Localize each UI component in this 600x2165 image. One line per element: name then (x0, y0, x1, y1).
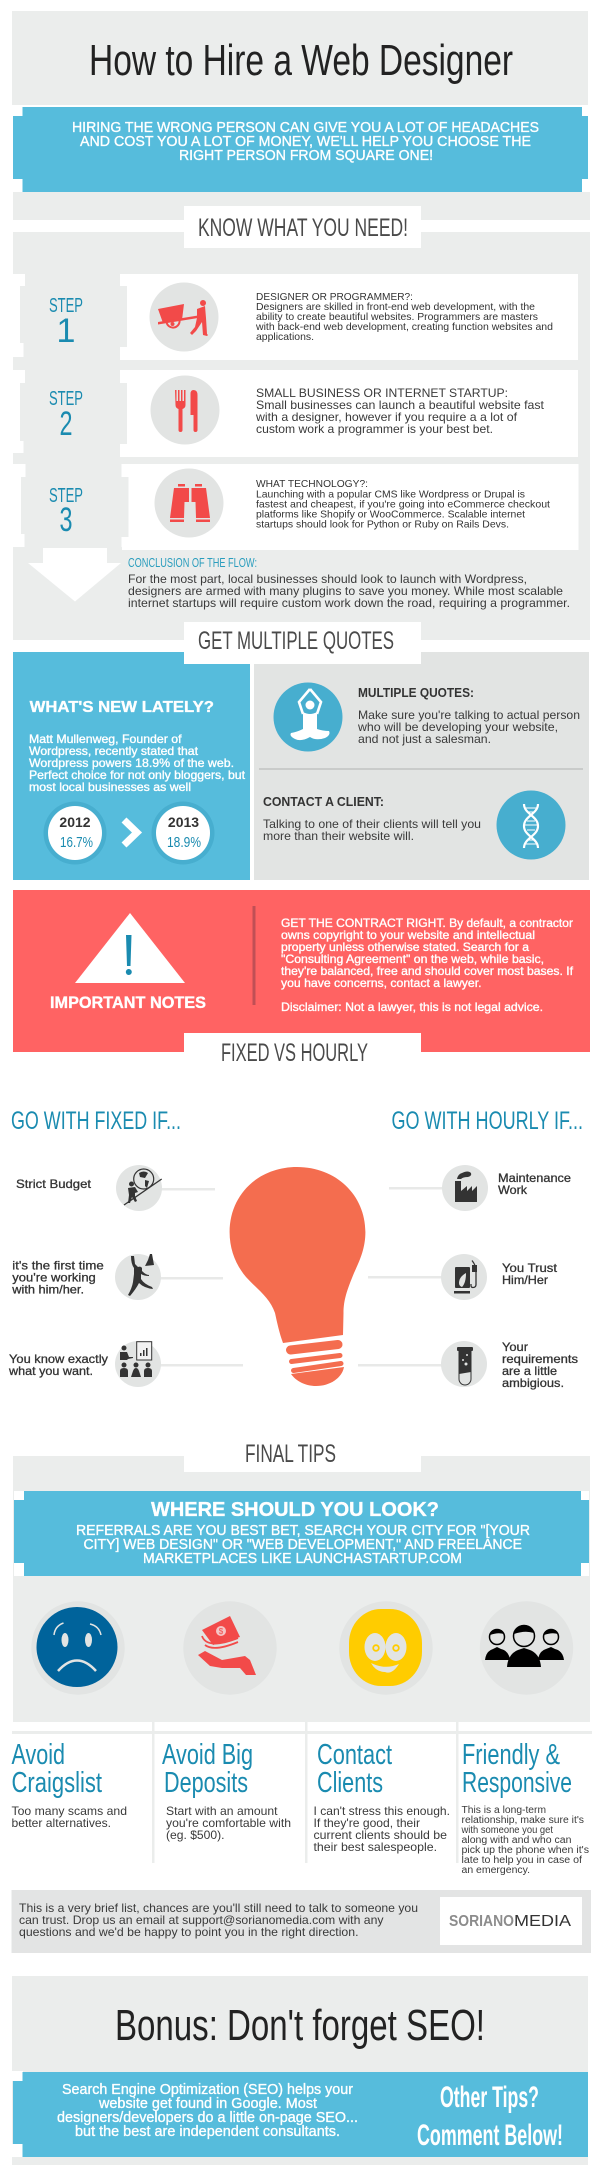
important notes text: owns copyright to your website and intellectual (281, 928, 535, 942)
item: you trust him/her: You Trust (502, 1261, 558, 1275)
tip: friendly and responsive (461, 1739, 589, 1876)
bonus banner: designers/developers do a little on-page SEO... (57, 2109, 358, 2126)
callout: other tips (417, 2081, 563, 2152)
important notes text: Disclaimer: Not a lawyer, this is not legal advice. (281, 1000, 543, 1014)
tip: friendly and responsive: an emergency. (462, 1865, 530, 1876)
conclusion: CONCLUSION OF THE FLOW: (128, 555, 257, 570)
title panel (12, 11, 588, 105)
icon: fork and knife (150, 376, 220, 444)
step 3 text: Launching with a popular CMS like Wordpress or Drupal is (256, 490, 525, 501)
step 3 text: WHAT TECHNOLOGY?: (256, 479, 368, 490)
icon: dna (496, 790, 566, 860)
tip: friendly and responsive: pick up the phone when it's (462, 1845, 589, 1856)
stat: 2013: 18.9% (167, 834, 201, 851)
item: know what you want: what you want. (8, 1364, 93, 1378)
step 3 text (256, 479, 550, 531)
what's new text: Matt Mullenweg, Founder of (29, 732, 182, 746)
panel: important notes (13, 890, 590, 1052)
tip: contact clients: If they're good, their (314, 1816, 420, 1830)
icon: warning triangle (75, 913, 185, 983)
logo: MEDIA (514, 1913, 571, 1930)
icon: money and hand (183, 1601, 277, 1695)
step 3 row: STEP (49, 485, 83, 507)
tip: friendly and responsive: late to help you in case of (462, 1855, 582, 1866)
conclusion (128, 555, 570, 610)
item: first time: it's the first time (12, 1258, 104, 1272)
step 3 row (13, 464, 578, 553)
item: strict budget: Strict Budget (16, 1177, 92, 1191)
contact strip (12, 1890, 591, 1953)
banner: where should you look: CITY] WEB DESIGN" OR "WEB DEVELOPMENT," AND FREELANCE (84, 1536, 522, 1553)
step 3 text: platforms like Shopify or WooCommerce. Scalable internet (256, 510, 525, 521)
bonus banner: but the best are independent consultants. (75, 2123, 340, 2140)
tip: contact clients: Contact (317, 1739, 392, 1771)
important notes text: GET THE CONTRACT RIGHT. By default, a contractor (281, 916, 573, 930)
tip: contact clients (314, 1739, 450, 1854)
contact strip: can trust. Drop us an email at support@sorianomedia.com with any (19, 1913, 384, 1927)
item: know what you want (8, 1341, 243, 1387)
bonus banner: Search Engine Optimization (SEO) helps your (62, 2081, 353, 2098)
what's new text: Wordpress powers 18.9% of the web. (29, 756, 234, 770)
heading: get multiple quotes (184, 622, 421, 664)
stat: 2013: 2013 (168, 814, 199, 830)
multiple quotes text: who will be developing your website, (357, 720, 558, 734)
stat: 2013 (152, 802, 214, 864)
multiple quotes text (357, 686, 580, 746)
heading: go with fixed: GO WITH FIXED IF... (11, 1107, 181, 1135)
panel: know what you need (13, 192, 590, 640)
icon: cart (150, 282, 218, 352)
intro text: RIGHT PERSON FROM SQUARE ONE! (179, 147, 433, 164)
tip: contact clients: current clients should be (314, 1828, 447, 1842)
important notes text: they're balanced, free and should cover most bases. If (281, 964, 574, 978)
tip: contact clients: their best salespeople. (314, 1840, 437, 1854)
heading: know what you need: KNOW WHAT YOU NEED! (198, 214, 408, 242)
step 2 text: custom work a programmer is your best bet. (256, 422, 493, 436)
item: you trust him/her (368, 1254, 558, 1300)
icon: happy face (339, 1601, 433, 1695)
contact a client text: Talking to one of their clients will tell you (263, 817, 481, 831)
icon: binoculars (154, 468, 224, 538)
item: first time: with him/her. (11, 1282, 84, 1296)
item: first time: you're working (12, 1271, 96, 1285)
panel: what's new: WHAT'S NEW LATELY? (30, 699, 214, 716)
what's new text (29, 732, 246, 794)
step 1 text: applications. (256, 332, 314, 343)
panel: multiple quotes (254, 652, 589, 880)
important notes text (281, 916, 574, 1014)
intro text: AND COST YOU A LOT OF MONEY, WE'LL HELP YOU CHOOSE THE (80, 133, 531, 150)
intro text (72, 119, 539, 164)
contact a client text (263, 795, 481, 843)
panel: final tips (13, 1440, 590, 1722)
step 1 text (255, 292, 553, 343)
banner: where should you look: WHERE SHOULD YOU LOOK? (151, 1499, 439, 1521)
important notes text: "Consulting Agreement" on the web, while basic, (281, 952, 544, 966)
multiple quotes text: Make sure you're talking to actual person (358, 708, 580, 722)
bonus title: Bonus: Don't forget SEO! (115, 2001, 485, 2050)
step 2 row: STEP (49, 388, 83, 410)
tip: avoid big deposits: Deposits (164, 1767, 248, 1799)
step 1 text: ability to create beautiful websites. Programmers are masters (256, 312, 538, 323)
step 2 text: with a designer, however if you require a a lot of (255, 410, 518, 424)
step 3 text: fastest and cheapest, if you're going into eCommerce checkout (256, 500, 550, 511)
what's new text: most local businesses as well (29, 780, 191, 794)
tip: avoid craigslist: Avoid (12, 1739, 65, 1771)
bonus banner (12, 2071, 588, 2157)
icon: money and hand: $ (219, 1627, 224, 1636)
banner: where should you look: MARKETPLACES LIKE LAUNCHASTARTUP.COM (143, 1550, 462, 1567)
tip: avoid craigslist: Craigslist (12, 1767, 102, 1799)
what's new text: Perfect choice for not only bloggers, but (29, 768, 246, 782)
tip: avoid big deposits: Start with an amount (166, 1804, 278, 1818)
bonus banner: website get found in Google. Most (98, 2095, 318, 2112)
item: ambiguous requirements: requirements (502, 1352, 578, 1366)
step 3 text: startups should look for Python or Ruby on Rails Devs. (256, 520, 509, 531)
tip: avoid craigslist (12, 1739, 127, 1830)
step 1 text: Designers are skilled in front-end web development, with the (256, 302, 535, 313)
tip: friendly and responsive: relationship, make sure it's (462, 1815, 584, 1826)
tip: friendly and responsive: along with and who can (462, 1835, 572, 1846)
heading: final tips: FINAL TIPS (245, 1440, 336, 1468)
stat: 2012: 2012 (59, 814, 91, 830)
heading: fixed vs hourly (184, 1033, 421, 1069)
item: maintenance work (389, 1165, 571, 1211)
tip: avoid big deposits: (eg. $500). (166, 1828, 224, 1842)
item: know what you want: You know exactly (9, 1352, 108, 1366)
step 1 row: STEP (49, 295, 83, 317)
heading: final tips (184, 1440, 421, 1472)
step 1 row: 1 (57, 312, 75, 350)
heading: fixed vs hourly: FIXED VS HOURLY (221, 1039, 368, 1067)
step 3 row: 3 (60, 501, 72, 539)
step 2 text (255, 386, 545, 436)
step 2 row (13, 370, 578, 464)
item: maintenance work: Maintenance (498, 1171, 571, 1185)
stat: 2012 (44, 802, 106, 864)
contact strip: This is a very brief list, chances are you'll still need to talk to someone you (19, 1901, 418, 1915)
item: first time (11, 1254, 223, 1300)
logo: SORIANO (449, 1913, 514, 1930)
icon: people (480, 1601, 573, 1695)
conclusion: For the most part, local businesses should look to launch with Wordpress, (128, 572, 527, 586)
step 2 row: 2 (60, 405, 72, 443)
intro banner (13, 107, 588, 192)
icon: sad face (31, 1601, 125, 1695)
tip: friendly and responsive: This is a long-term (462, 1805, 546, 1816)
item: maintenance work: Work (498, 1183, 528, 1197)
heading: get multiple quotes: GET MULTIPLE QUOTES (198, 627, 394, 655)
panel: important notes: IMPORTANT NOTES (50, 993, 206, 1012)
contact a client text: more than their website will. (263, 829, 414, 843)
important notes text: property unless otherwise stated. Search for a (281, 940, 529, 954)
item: strict budget (16, 1165, 215, 1211)
arrow: chevron (124, 820, 137, 845)
step 2 text: SMALL BUSINESS OR INTERNET STARTUP: (256, 386, 508, 400)
tip: contact clients: Clients (317, 1767, 383, 1799)
item: you trust him/her: Him/Her (502, 1273, 548, 1287)
multiple quotes text: MULTIPLE QUOTES: (358, 686, 474, 700)
step 1 text: with back-end web development, creating function websites and (255, 322, 553, 333)
banner: where should you look: REFERRALS ARE YOU BEST BET, SEARCH YOUR CITY FOR "[YOUR (76, 1522, 530, 1539)
important notes text: you have concerns, contact a lawyer. (281, 976, 482, 990)
conclusion: designers are armed with many plugins to save you money. While most scalable (128, 584, 563, 598)
arrow: down (28, 548, 121, 602)
step 1 row (13, 272, 578, 370)
panel: what's new (13, 652, 250, 880)
tip: friendly and responsive: Friendly & (462, 1739, 560, 1771)
stat: 2012: 16.7% (60, 834, 93, 851)
item: ambiguous requirements (358, 1340, 578, 1390)
item: ambiguous requirements: are a little (502, 1364, 557, 1378)
icon: yoga (274, 682, 342, 752)
what's new text: Wordpress, recently stated that (29, 744, 199, 758)
step 2 text: Small businesses can launch a beautiful website fast (256, 398, 545, 412)
logo (440, 1897, 582, 1945)
heading: know what you need (184, 206, 421, 248)
intro text: HIRING THE WRONG PERSON CAN GIVE YOU A LOT OF HEADACHES (72, 119, 539, 136)
item: ambiguous requirements: Your (502, 1340, 528, 1354)
contact strip: questions and we'd be happy to point you in the right direction. (19, 1925, 358, 1939)
tip: avoid craigslist: Too many scams and (12, 1804, 127, 1818)
panel: bonus (12, 1976, 588, 2165)
banner: where should you look (14, 1491, 589, 1576)
tip: avoid big deposits: Avoid Big (162, 1739, 253, 1771)
tip: avoid big deposits: you're comfortable with (166, 1816, 291, 1830)
tip: friendly and responsive: with someone you get (461, 1825, 553, 1836)
tip: contact clients: I can't stress this enough. (314, 1804, 450, 1818)
icon: light bulb (230, 1167, 365, 1386)
contact a client text: CONTACT A CLIENT: (263, 795, 384, 809)
item: ambiguous requirements: ambigious. (502, 1376, 564, 1390)
step 1 text: DESIGNER OR PROGRAMMER?: (256, 292, 413, 303)
conclusion: internet startups will require custom work down the road, requiring a programmer. (128, 596, 570, 610)
tip: avoid craigslist: better alternatives. (12, 1816, 111, 1830)
multiple quotes text: and not just a salesman. (358, 732, 491, 746)
tip: avoid big deposits (162, 1739, 291, 1842)
tip columns grid (12, 1722, 592, 1863)
